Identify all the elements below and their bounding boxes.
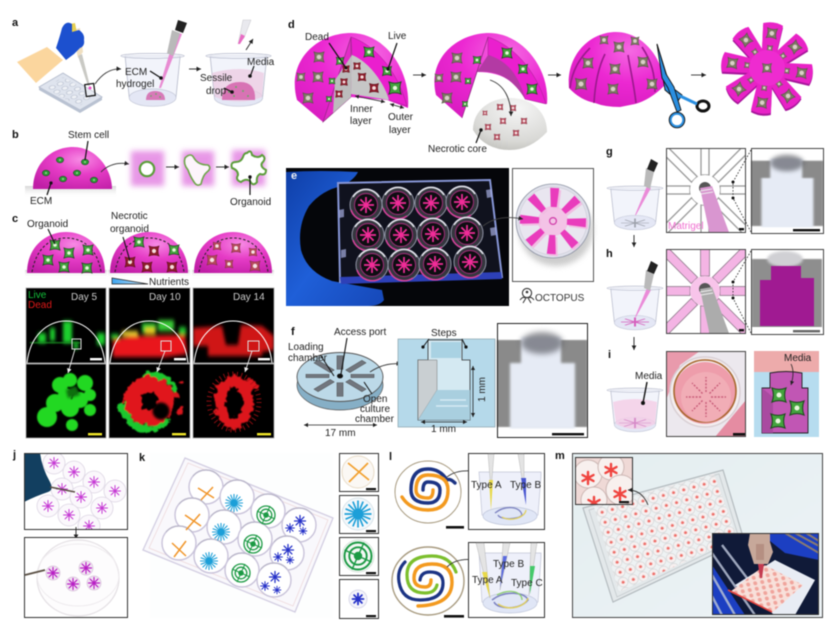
text: organoid: Organoid: [27, 219, 68, 230]
text: dead: Dead: [305, 32, 329, 43]
label d: d: [288, 19, 295, 31]
icon: chamber cross-section: [398, 339, 495, 427]
zoom connector: [733, 251, 751, 333]
panel i: media addition: [607, 349, 819, 437]
panel h: filled channels: [606, 248, 825, 351]
image: chamber micrograph: [497, 323, 588, 438]
inset: close-up wells with red stars: [574, 454, 636, 513]
icon: dome with live organoids: [25, 232, 107, 278]
text: inner layer: Inner: [350, 104, 373, 115]
dimension: 17 mm: [304, 424, 377, 426]
text: type A B: [471, 480, 541, 491]
inset: OCTOPUS device: [512, 168, 594, 282]
text: access port: Access port: [334, 327, 386, 338]
image: day 10 organoid: [109, 364, 190, 438]
arrow: [216, 166, 229, 168]
inset: green concentric: [340, 538, 378, 576]
panel b: stem cell to organoid: [12, 129, 271, 208]
panel j: retrieving devices: [12, 449, 128, 618]
icon: beaker with sessile drop and media: [206, 20, 271, 106]
icon: arm with glove and pipette over well plate: [17, 23, 102, 113]
label l: l: [389, 451, 392, 463]
icon: mature organoid in matrix: [232, 150, 266, 186]
photo: gloved hand holding 12-well plate: [286, 168, 509, 306]
text: loading chamber: Loading: [288, 342, 324, 353]
arrow: dome to square: [101, 163, 129, 172]
panel d: layered dome cut open: [288, 19, 814, 155]
photo: plate with stained devices and forceps: [24, 452, 128, 537]
image: day 5 section: [26, 288, 106, 363]
arrow: media into chamber: [791, 364, 793, 385]
icon: beaker with pipette loading: [607, 159, 663, 230]
arrow: [189, 68, 201, 70]
image: empty chamber micrograph: [751, 148, 824, 234]
icon: flattened flower tissue: [720, 21, 814, 117]
text: Matrigel: Matrigel: [668, 221, 704, 232]
photo: two-material spiral: [395, 461, 464, 529]
label f: f: [291, 326, 295, 338]
icon: dome with necrotic organoids: [108, 232, 190, 278]
label k: k: [139, 452, 146, 464]
text: open culture chamber: Open: [363, 394, 387, 405]
label h: h: [606, 248, 613, 260]
label g: g: [606, 146, 613, 158]
arrow: g to h: [633, 235, 635, 247]
inset: navy star: [340, 580, 378, 618]
label i: i: [608, 349, 611, 361]
text: OCTOPUS: OCTOPUS: [535, 293, 585, 304]
label e: e: [291, 170, 297, 182]
label c: c: [12, 213, 18, 225]
panel f: device geometry: [288, 323, 588, 439]
dimension: inner and outer layer: [355, 96, 404, 108]
icon: beaker with media: [607, 388, 663, 432]
text: day labels: [71, 292, 265, 303]
arrow: [166, 166, 179, 168]
text: stem cell: Stem cell: [68, 130, 109, 141]
text: inner layer: [350, 104, 373, 127]
arrow: [447, 559, 482, 567]
text: sessile drop: Sessile: [200, 73, 233, 84]
text: media: Media: [247, 57, 275, 68]
arrows: section to zoomed organoid: [68, 349, 252, 373]
image: empty channels under microscope: [665, 147, 747, 234]
text: media: Media: [784, 353, 812, 364]
icon: budding organoid in matrix: [182, 151, 214, 186]
inset: two-nozzle printing: [468, 454, 544, 530]
panel k: printed shapes in 12-well plate: [139, 452, 378, 618]
arrow: disc to chamber section: [370, 364, 401, 372]
text: loading chamber: chamber: [288, 353, 328, 364]
text: type A B C: [472, 559, 543, 589]
icon: hollow dome shell: [434, 33, 547, 118]
label m: m: [555, 450, 565, 462]
text: ECM hydrogel: ECM: [125, 67, 147, 78]
text: outer layer: [388, 112, 414, 136]
panel l: multi-material spirals: [389, 451, 544, 618]
text: outer layer: layer: [389, 125, 411, 136]
panel m: automated 96-well printing: [555, 450, 822, 618]
arrow: plate to inset: [628, 490, 648, 505]
text: open culture chamber: [355, 394, 395, 425]
text: day labels: Day 14: [233, 292, 265, 303]
text: type A B: Type A: [471, 480, 502, 491]
icon: single cell in matrix: [131, 151, 164, 186]
image: day 10 section: [109, 288, 190, 363]
photo: device in media: [666, 351, 746, 437]
panel a: sessile drop seeding: hydrogel: [116, 79, 154, 90]
text: inner layer: layer: [350, 116, 372, 127]
panel f: device geometry: 17 mm: [325, 428, 356, 439]
arrow: well to device: [483, 218, 523, 226]
arrow: [691, 74, 706, 76]
image: filled channels under microscope: [665, 248, 747, 335]
icon: organoids in filled chamber: [754, 351, 819, 437]
icon: nutrient gradient wedge: [112, 278, 148, 284]
panel c: necrosis in domes over time: organoid: [110, 224, 149, 235]
icon: octopus logo: [520, 288, 534, 303]
panel e: OCTOPUS plate photo: [286, 168, 594, 306]
text: loading chamber: [288, 342, 328, 364]
icon: beaker with ECM hydrogel: [121, 20, 187, 106]
text: live dead legend: [28, 290, 52, 311]
inset: blue sunburst: [340, 496, 378, 534]
panel a: sessile drop seeding: [12, 17, 275, 113]
photo: printer depositing into plate: [712, 533, 819, 615]
inset: three-nozzle printing: [468, 542, 544, 618]
inset: orange cross: [340, 454, 378, 492]
image: day 14 section: [193, 288, 274, 363]
text: organoid: Organoid: [230, 197, 271, 208]
text: live dead legend: Dead: [28, 300, 52, 311]
text: media: Media: [635, 371, 663, 382]
image: day 5 organoid: [26, 364, 106, 438]
text: ECM: ECM: [30, 196, 52, 207]
icon: cut-away dome with dead and live layers: [295, 33, 408, 122]
arrow: h to i: [633, 337, 635, 350]
text: day labels: Day 5: [71, 292, 98, 303]
image: day 14 organoid: [193, 364, 274, 438]
photo: dish with removed devices: [24, 538, 128, 618]
icon: ECM dome with stem cells: [25, 147, 116, 198]
photo: 12-well plate with coloured prints: [143, 453, 333, 618]
text: type A B C: Type C: [511, 578, 543, 589]
arrow: plate to beaker: [95, 69, 121, 84]
panel c: necrosis in domes over time: [12, 211, 274, 438]
label j: j: [12, 449, 16, 461]
panel g: Matrigel loading: [606, 147, 825, 248]
arrow: [548, 74, 561, 76]
label b: b: [12, 129, 19, 141]
arrow: j top to bottom: [75, 527, 77, 539]
text: steps: Steps: [431, 328, 457, 339]
zoom connector: [733, 150, 751, 232]
icon: necrotic core: [473, 98, 547, 150]
icon: scissors: [657, 44, 709, 128]
text: type A B: Type B: [510, 480, 541, 491]
text: nutrients: Nutrients: [149, 277, 189, 288]
text: day labels: Day 10: [149, 292, 181, 303]
icon: beaker with filled device: [607, 261, 663, 330]
arrow: core removal: [490, 80, 511, 116]
icon: device disc with chambers: [297, 352, 383, 410]
text: live: Live: [388, 31, 407, 42]
text: necrotic organoid: Necrotic: [111, 211, 148, 222]
panel f: device geometry: 1 mm: [477, 377, 488, 402]
text: live dead legend: Live: [28, 290, 47, 301]
label a: a: [12, 17, 19, 29]
icon: dome with dead organoids: [192, 232, 274, 278]
panel a: sessile drop seeding: drop: [206, 86, 226, 97]
text: type A B C: Type B: [493, 559, 524, 570]
photo: three-material spiral: [392, 547, 464, 618]
text: outer layer: Outer: [388, 112, 414, 123]
dimension: 1 mm horizontal: [421, 421, 467, 423]
text: type A B C: Type A: [472, 575, 503, 586]
text: open culture chamber: chamber: [355, 414, 395, 425]
panel f: device geometry: 1 mm: [431, 424, 456, 435]
text: necrotic core: Necrotic core: [428, 144, 487, 155]
icon: slit dome: [569, 32, 664, 107]
dimension: 1 mm vertical: [472, 366, 474, 417]
arrow: [413, 74, 426, 76]
photo: 96-well plate background: [572, 454, 822, 618]
arrow: [447, 471, 480, 477]
image: filled chamber micrograph: [751, 249, 824, 334]
text: open culture chamber: culture: [360, 404, 390, 415]
